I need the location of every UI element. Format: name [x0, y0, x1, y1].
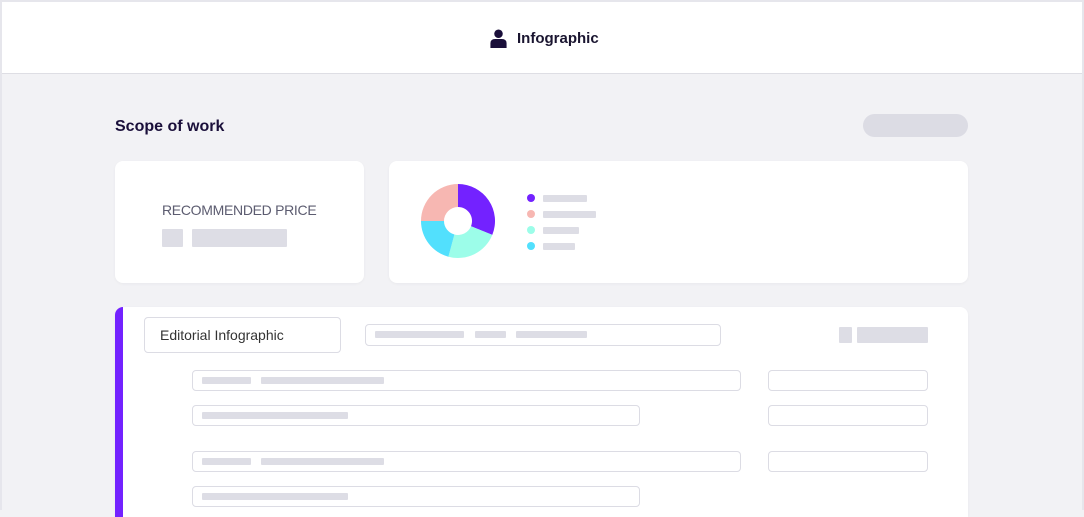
panel: work item [115, 307, 968, 517]
row 3 [192, 451, 741, 472]
price placeholder [839, 327, 928, 343]
item name box [144, 317, 341, 353]
header bar [0, 0, 1084, 74]
donut chart [421, 184, 495, 258]
row 1 [192, 370, 741, 391]
icon: user [490, 30, 507, 48]
accent bar [115, 307, 123, 517]
title: Scope of work [115, 118, 224, 135]
row 4 [192, 486, 640, 507]
header title: Infographic [517, 30, 599, 47]
row 2 [192, 405, 640, 426]
item name box: Editorial Infographic [160, 327, 284, 343]
description field [365, 324, 721, 346]
panel: recommended price [115, 161, 364, 283]
legend [527, 194, 596, 250]
price placeholder [162, 229, 287, 247]
pill button placeholder [863, 114, 968, 137]
label: RECOMMENDED PRICE [162, 202, 316, 218]
panel: chart [389, 161, 968, 283]
